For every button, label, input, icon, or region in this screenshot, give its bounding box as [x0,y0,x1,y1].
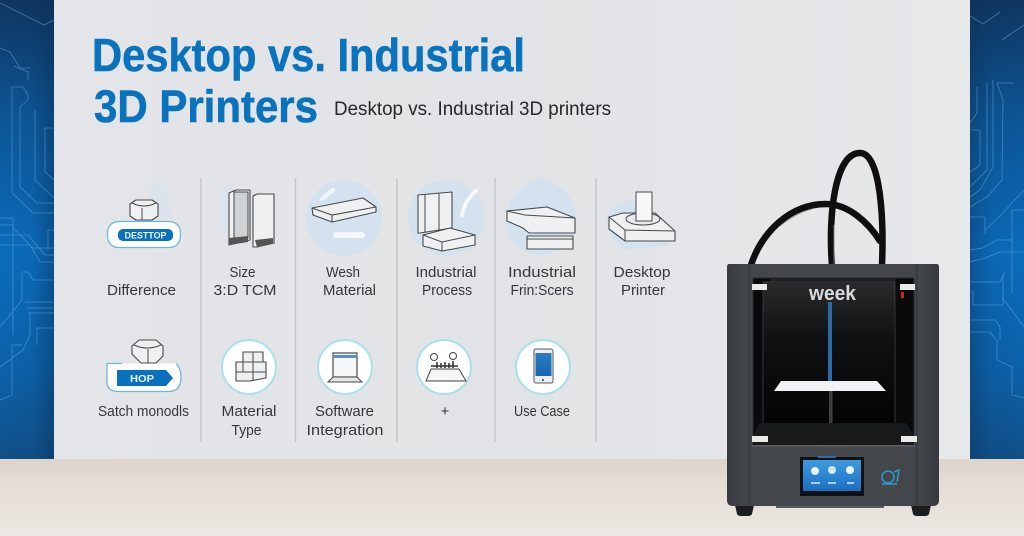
label: Industrial: Industrial [508,265,576,281]
label: Industrial: Industrial [416,265,476,281]
label: Integration: Integration [306,423,384,439]
build chamber [752,278,915,446]
item: Size icon [218,184,274,247]
touch screen [800,456,864,496]
panel: right circuit board [970,0,1024,459]
status light [901,292,904,298]
label: Material: Material [222,404,276,420]
label: Use Case: Use Case [514,404,570,420]
background wall [54,0,970,460]
icon: laptop [318,340,372,394]
item: Industrial Process icon [408,180,484,256]
column dividers [201,178,596,442]
panel: left circuit board [0,0,54,459]
label: Difference: Difference [107,283,176,299]
printer body [727,264,939,506]
badge: HOP: HOP [130,374,154,385]
label: Size: Size [230,265,256,281]
title [92,29,525,132]
label: Software: Software [315,404,374,420]
label: Satch monodls: Satch monodls [98,404,189,420]
icon: nut [130,200,158,220]
label: Process: Process [422,283,472,299]
item: Wesh Material icon [306,180,382,256]
icon: material type [222,340,276,394]
title: Desktop vs. Industrial [92,29,525,81]
label: 3:D TCM: 3:D TCM [214,283,276,299]
item: Desktop Printer icon [606,192,675,250]
build plate [774,381,886,391]
printer logo: week: week [808,283,857,305]
lead screw [829,391,832,423]
title: 3D Printers [94,81,318,132]
item: second badge [107,340,181,392]
icon: phone [516,340,570,394]
printer [727,153,939,516]
label: Frin:Scers: Frin:Scers [510,283,574,299]
feet [735,505,931,516]
item: Industrial Printers icon [505,178,576,256]
label: plus: + [441,404,449,420]
blue rod [828,302,832,381]
label: Material: Material [323,283,376,299]
label: Type: Type [232,423,262,439]
subtitle: Desktop vs. Industrial 3D printers [334,99,611,120]
label: Printer: Printer [621,283,665,299]
clips [752,284,917,442]
icon: workbench [417,340,471,394]
cables [751,153,882,265]
item: Difference desktop badge [108,180,180,248]
cyan logo [882,470,899,484]
label: Desktop: Desktop [614,265,670,281]
badge: desktop: DESTTOP [124,230,166,240]
floor [0,459,1024,536]
label: Wesh: Wesh [326,265,360,281]
icon: nut [132,340,163,363]
